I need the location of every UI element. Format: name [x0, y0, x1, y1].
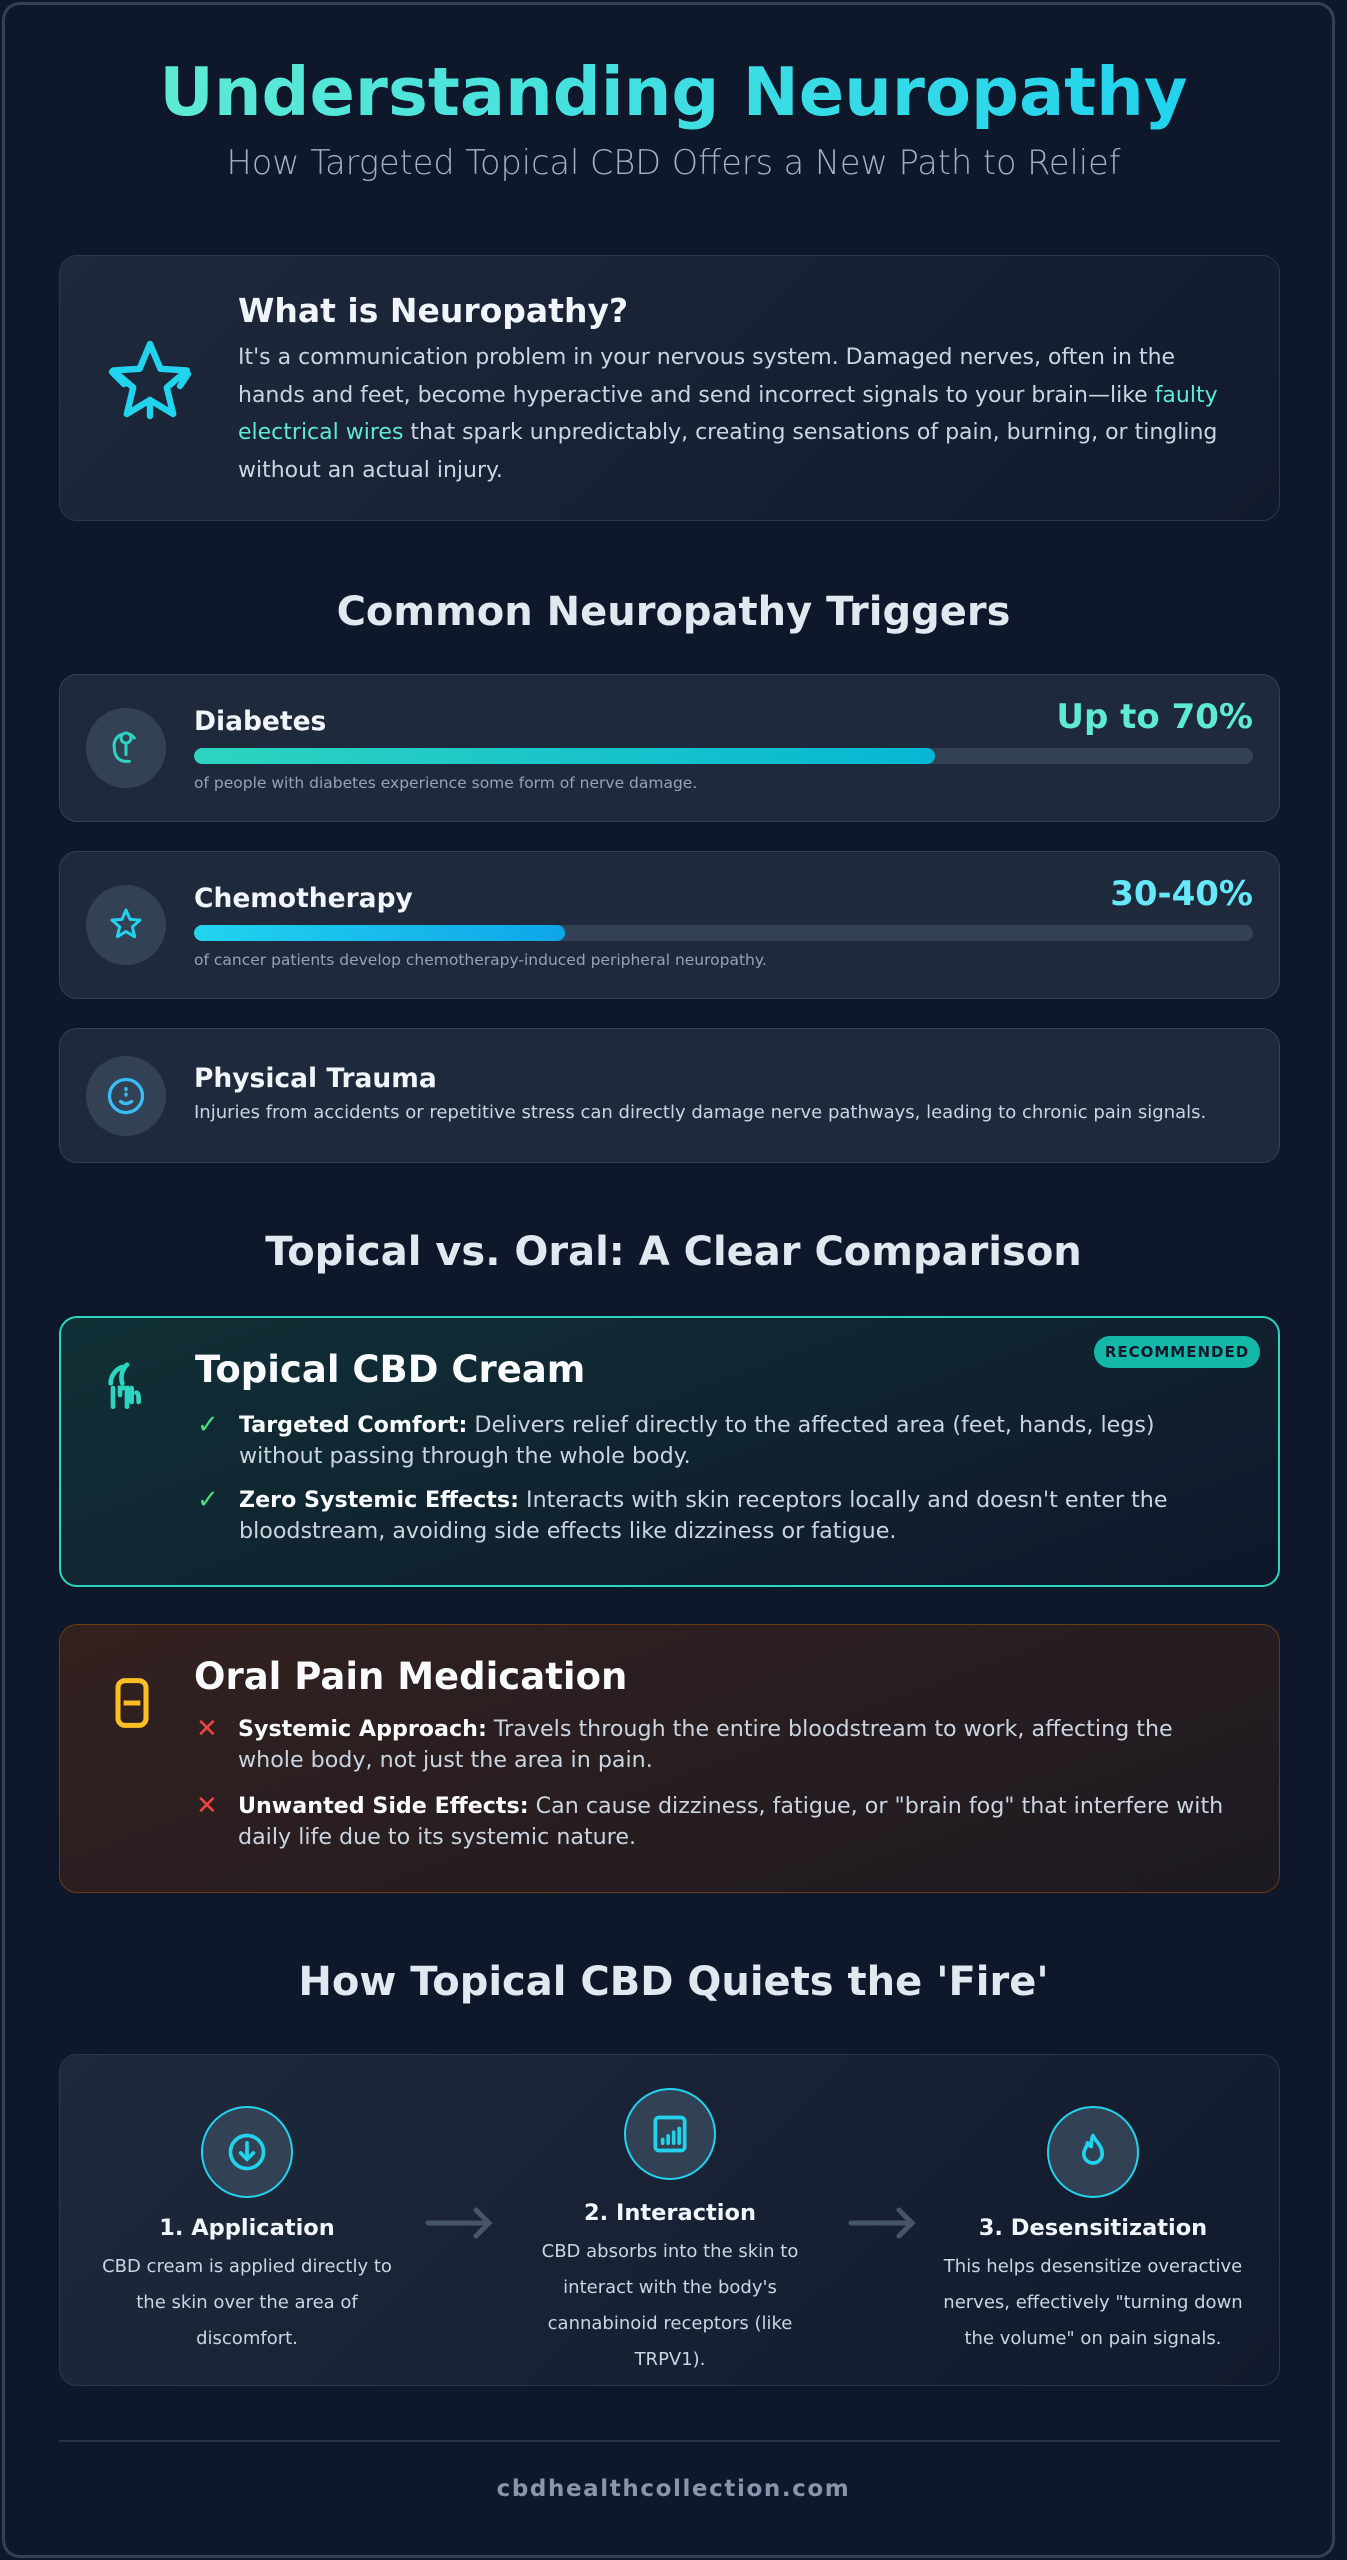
icon: diabetes: [86, 708, 166, 788]
icon: pill: [116, 1678, 148, 1728]
subtitle: How Targeted Topical CBD Offers a New Path to Relief: [226, 143, 1120, 182]
step 3: [943, 2106, 1243, 2349]
arrow 2: [848, 2208, 916, 2238]
drawback 1: Systemic Approach: Travels through the entire bloodstream to work, affecting the whole body, not just the area in pain.: [238, 1716, 1173, 1773]
bar chart: [194, 748, 1253, 764]
icon: star: [86, 885, 166, 965]
panel: physical trauma: Physical Trauma: [194, 1063, 437, 1094]
step 2: CBD absorbs into the skin to interact with the body's cannabinoid receptors (like TRPV1).: [542, 2241, 798, 2370]
body text: It's a communication problem in your nervous system. Damaged nerves, often in the hands and feet, become hyperactive and send incorrect signals to your brain—like faulty electrical wires that spark unpredictably, creating sensations of pain, burning, or tingling without an actual injury.: [238, 345, 1218, 482]
step 3: 3. Desensitization: [979, 2215, 1207, 2241]
panel: what is neuropathy: [59, 255, 1280, 521]
icon: face: [86, 1056, 166, 1136]
icon: download: [201, 2106, 293, 2198]
step 1: 1. Application: [159, 2215, 335, 2241]
panel: topical cbd: [59, 1316, 1280, 1587]
heading: how it works: How Topical CBD Quiets the 'Fire': [298, 1959, 1049, 2005]
panel: topical cbd: ✓: [197, 1410, 219, 1440]
panel: oral medication: ✕: [196, 1791, 218, 1821]
heading: What is Neuropathy?: [238, 291, 628, 330]
panel: physical trauma: [59, 1028, 1280, 1163]
panel: chemotherapy: 30-40%: [1110, 874, 1253, 914]
bar chart: [194, 925, 1253, 941]
panel: diabetes: [59, 674, 1280, 822]
arrow 1: [426, 2208, 492, 2238]
title: Understanding Neuropathy: [159, 53, 1188, 131]
step 2: [542, 2088, 798, 2370]
panel: chemotherapy: Chemotherapy: [194, 883, 413, 914]
benefit 1: Targeted Comfort: Delivers relief directly to the affected area (feet, hands, legs) without passing through the whole body.: [239, 1412, 1155, 1469]
icon: nerve star: [108, 340, 192, 420]
panel: oral medication: [59, 1624, 1280, 1893]
panel: chemotherapy: of cancer patients develop chemotherapy-induced peripheral neuropathy.: [194, 951, 767, 969]
heading: triggers: Common Neuropathy Triggers: [337, 589, 1010, 635]
icon: chart: [624, 2088, 716, 2180]
panel: diabetes: Diabetes: [194, 706, 326, 737]
step 2: 2. Interaction: [584, 2200, 756, 2226]
badge: recommended: RECOMMENDED: [1105, 1343, 1249, 1361]
heading: Oral Pain Medication: [194, 1655, 627, 1698]
icon: flame: [1047, 2106, 1139, 2198]
panel: topical cbd: ✓: [197, 1485, 219, 1515]
panel: diabetes: of people with diabetes experience some form of nerve damage.: [194, 774, 697, 792]
step 3: This helps desensitize overactive nerves, effectively "turning down the volume" on pain signals.: [943, 2256, 1243, 2349]
step 1: [102, 2106, 392, 2349]
footer: cbdhealthcollection.com: [497, 2476, 850, 2502]
icon: hand: [108, 1362, 141, 1409]
panel: steps: [59, 2054, 1280, 2386]
badge: recommended: [1094, 1336, 1260, 1368]
panel: oral medication: ✕: [196, 1714, 218, 1744]
drawback 2: Unwanted Side Effects: Can cause dizziness, fatigue, or "brain fog" that interfere with daily life due to its systemic nature.: [238, 1793, 1223, 1850]
step 1: CBD cream is applied directly to the skin over the area of discomfort.: [102, 2256, 392, 2349]
heading: Topical CBD Cream: [195, 1348, 585, 1391]
panel: diabetes: Up to 70%: [1056, 697, 1253, 737]
panel: chemotherapy: [59, 851, 1280, 999]
panel: physical trauma: Injuries from accidents or repetitive stress can directly damage nerve pathways, leading to chronic pain signals.: [194, 1102, 1206, 1123]
benefit 2: Zero Systemic Effects: Interacts with skin receptors locally and doesn't enter the bloodstream, avoiding side effects like dizziness or fatigue.: [239, 1487, 1168, 1544]
heading: comparison: Topical vs. Oral: A Clear Comparison: [265, 1229, 1082, 1275]
